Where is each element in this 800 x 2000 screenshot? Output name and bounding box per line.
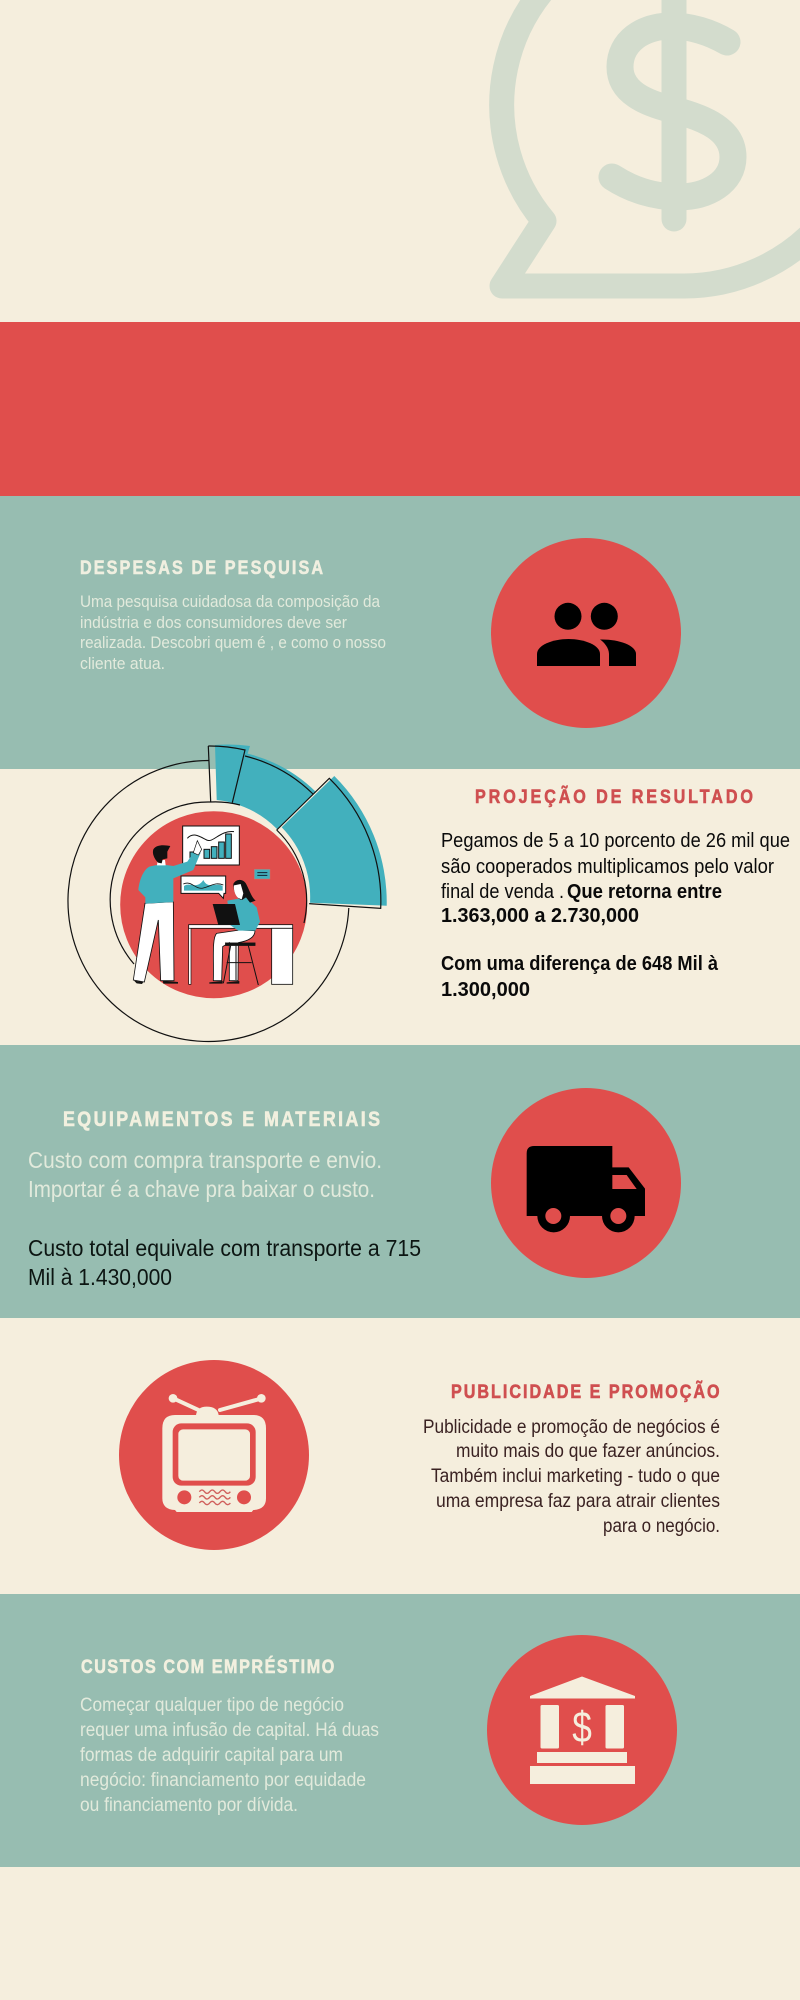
text: custo com compra: Importar é a chave pra baixar o custo. (28, 1176, 375, 1202)
heading: equipamentos e materiais: EQUIPAMENTOS E MATERIAIS (63, 1108, 380, 1131)
text: custos com empréstimo: formas de adquirir capital para um (80, 1745, 343, 1766)
heading: despesas de pesquisa: DESPESAS DE PESQUISA (80, 557, 323, 578)
text: custos com empréstimo: ou financiamento por dívida. (80, 1795, 298, 1816)
speech bubble chart (181, 876, 226, 898)
heading: custos com empréstimo: CUSTOS COM EMPRÉSTIMO (81, 1655, 334, 1677)
text: despesas de pesquisa (80, 592, 386, 673)
text: projeção de resultado: são cooperados multiplicamos pelo valor (441, 856, 774, 878)
icon: television in red circle (119, 1360, 309, 1550)
stool (223, 943, 258, 985)
icon: bank in red circle: $ (572, 1703, 592, 1752)
desk (189, 925, 293, 984)
text: despesas de pesquisa: realizada. Descobri quem é , e como o nosso (80, 633, 386, 652)
illustration: radial chart with people at a desk (68, 744, 387, 1042)
text: publicidade e promoção: uma empresa faz para atrair clientes (436, 1491, 720, 1512)
radial chart outlines (68, 746, 381, 1042)
text: projeção de resultado: Com uma diferença de 648 Mil à (441, 953, 719, 975)
text: publicidade e promoção: para o negócio. (603, 1516, 720, 1537)
text: publicidade e promoção: Também inclui marketing - tudo o que (431, 1466, 720, 1487)
icon: bank in red circle (487, 1635, 677, 1825)
text: custo com compra: Custo com compra transporte e envio. (28, 1147, 382, 1173)
icon: truck in red circle (491, 1088, 681, 1278)
text: custos com empréstimo: negócio: financiamento por equidade (80, 1770, 366, 1791)
text: custo com compra (28, 1147, 382, 1202)
text: projeção de resultado (441, 830, 790, 1001)
text: custos com empréstimo (80, 1695, 379, 1816)
panel: despesas de pesquisa (0, 496, 800, 769)
man (133, 841, 202, 984)
heading: publicidade e promoção: PUBLICIDADE E PROMOÇÃO (451, 1380, 720, 1402)
small note (254, 869, 270, 879)
text: custos com empréstimo: requer uma infusão de capital. Há duas (80, 1720, 379, 1741)
text: publicidade e promoção: Publicidade e promoção de negócios é (423, 1417, 720, 1438)
panel: equipamentos e materiais (0, 1045, 800, 1318)
text: publicidade e promoção: muito mais do que fazer anúncios. (456, 1441, 720, 1462)
text: despesas de pesquisa: Uma pesquisa cuidadosa da composição da (80, 592, 380, 611)
text: despesas de pesquisa: cliente atua. (80, 654, 165, 673)
red circle (119, 810, 308, 999)
text: projeção de resultado: 1.363,000 a 2.730,000 (441, 905, 639, 927)
text: projeção de resultado: final de venda . (441, 881, 564, 903)
woman (209, 880, 260, 984)
panel: custos com empréstimo (0, 1594, 800, 1867)
text: projeção de resultado: Que retorna entre (567, 881, 722, 903)
text: despesas de pesquisa: indústria e dos consumidores deve ser (80, 613, 347, 632)
text: custos com empréstimo: Começar qualquer tipo de negócio (80, 1695, 344, 1716)
heading: projeção de resultado: PROJEÇÃO DE RESULTADO (475, 785, 753, 807)
text: projeção de resultado: 1.300,000 (441, 979, 530, 1001)
text: custo total: Custo total equivale com transporte a 715 (28, 1235, 421, 1261)
people scene (133, 826, 293, 985)
panel: projeção de resultado text (441, 785, 790, 1001)
chart board (183, 826, 239, 865)
text: custo total: Mil à 1.430,000 (28, 1264, 172, 1290)
red banner (0, 322, 800, 496)
text: publicidade e promoção (423, 1417, 720, 1537)
teal radial sectors (215, 744, 387, 906)
text: custo total (28, 1235, 421, 1290)
panel: publicidade e promoção (119, 1360, 720, 1550)
icon: speech bubble with dollar sign (502, 0, 800, 286)
icon: people in red circle (491, 538, 681, 728)
